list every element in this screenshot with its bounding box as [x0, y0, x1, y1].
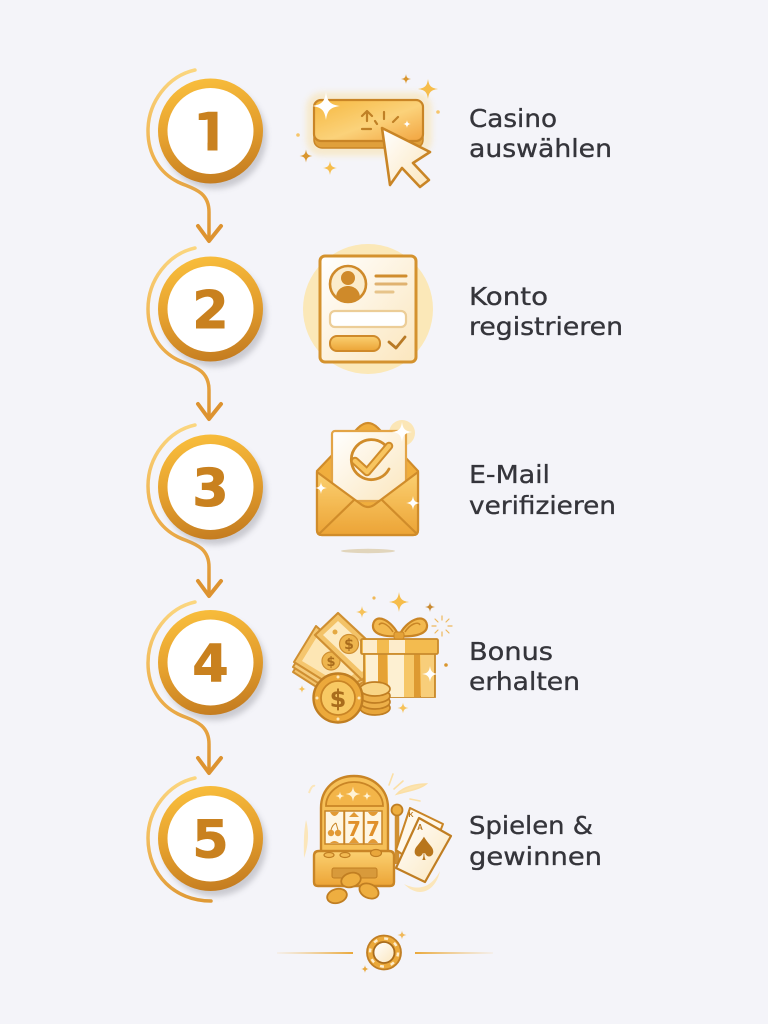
connector arrow 1 — [148, 70, 221, 241]
icon: slot machine and cards — [304, 774, 451, 905]
footer ornament: chip with lines — [277, 930, 493, 973]
connector arc 5 — [148, 778, 211, 901]
label 4: Bonus — [469, 637, 553, 666]
label 5: gewinnen — [469, 842, 602, 871]
panel: step 3 — [148, 420, 616, 596]
label 2: registrieren — [469, 312, 623, 341]
icon: button with cursor — [296, 74, 440, 187]
icon: money and gift: $ — [326, 655, 336, 670]
icon: registration form — [303, 244, 433, 374]
panel: step 1 — [148, 70, 612, 241]
label 2 — [469, 282, 623, 341]
label 3: verifizieren — [469, 491, 616, 520]
panel: step 2 — [148, 244, 623, 419]
icon: slot machine and cards: ♠ — [410, 830, 438, 868]
connector arrow 4 — [148, 602, 221, 773]
label 3 — [469, 460, 616, 520]
number badge 1 — [158, 78, 266, 189]
label 4 — [469, 637, 580, 696]
connector arrow 3 — [148, 425, 221, 596]
icon: slot machine and cards: 7 — [366, 817, 380, 841]
number badge 5 — [158, 786, 266, 896]
label 1 — [469, 104, 612, 163]
number badge 5: 5 — [192, 810, 229, 870]
number badge 2 — [158, 256, 266, 367]
icon: slot machine and cards: 7 — [347, 817, 361, 841]
icon: envelope with check — [315, 420, 420, 553]
number badge 3: 3 — [192, 459, 229, 519]
icon: money and gift: $ — [330, 685, 346, 713]
label 5 — [469, 811, 602, 871]
number badge 1: 1 — [193, 103, 230, 163]
number badge 2: 2 — [192, 281, 229, 341]
number badge 4 — [158, 610, 266, 720]
label 1: auswählen — [469, 134, 612, 163]
label 1: Casino — [469, 104, 557, 133]
number badge 4: 4 — [192, 634, 229, 694]
label 3: E-Mail — [469, 460, 550, 489]
label 4: erhalten — [469, 667, 580, 696]
panel: step 4 — [148, 592, 580, 773]
connector arrow 2 — [148, 248, 221, 419]
icon: slot machine and cards: K — [408, 812, 414, 819]
icon: slot machine and cards: A — [417, 823, 423, 832]
icon: money and gift — [293, 592, 452, 722]
icon: money and gift: $ — [344, 637, 354, 653]
number badge 3 — [158, 434, 266, 545]
label 2: Konto — [469, 282, 548, 311]
label 5: Spielen & — [469, 811, 593, 840]
panel: step 5 — [148, 774, 602, 905]
